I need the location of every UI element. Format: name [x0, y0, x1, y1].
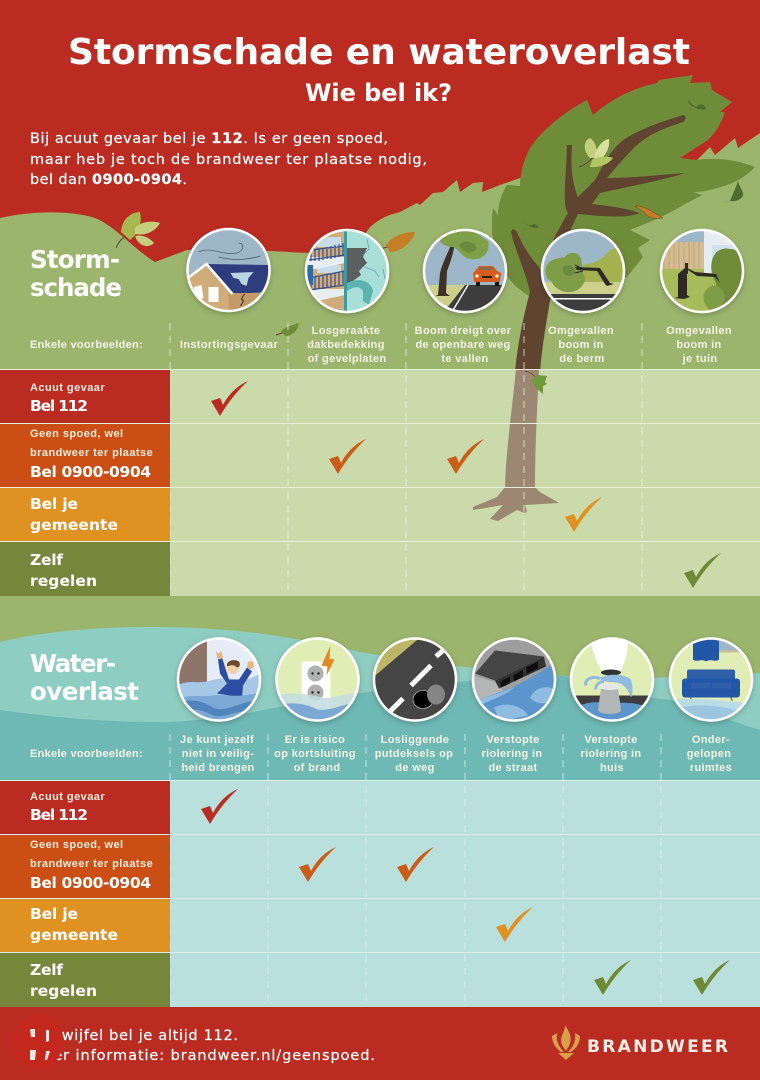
- row label: water municipality: [0, 899, 170, 952]
- column labels: water: putdeksels op: [375, 748, 453, 760]
- title: Stormschade en wateroverlast: [68, 32, 690, 73]
- leaf: dark right of canopy: [722, 181, 743, 203]
- row label: water no urgency: Bel 0900-0904: [30, 874, 151, 892]
- icon: person in water: [177, 638, 261, 722]
- row label: water self: [0, 953, 170, 1007]
- icon: flooded room with couch: [669, 638, 753, 722]
- row label: water acute: Bel 112: [30, 806, 88, 824]
- checks: storm: [211, 381, 721, 588]
- water section background: [0, 596, 760, 780]
- icon: fallen tree in garden: [660, 229, 744, 313]
- heading: water: Water-: [30, 649, 116, 678]
- intro paragraph: bel dan 0900-0904.: [30, 172, 187, 188]
- row label: water self: regelen: [30, 982, 97, 1000]
- footer text: [30, 1028, 375, 1064]
- leaf: pale in canopy: [579, 138, 613, 167]
- footer band: [0, 1007, 760, 1080]
- column labels: water: de weg: [395, 762, 435, 774]
- green storm hills: [0, 133, 760, 640]
- column labels: water: op kortsluiting: [274, 748, 356, 760]
- heading: storm: schade: [30, 273, 122, 302]
- row label: water no urgency: [0, 835, 170, 898]
- leaf: on trunk: [525, 371, 547, 394]
- column labels: water: de straat: [488, 762, 538, 774]
- row label: storm self: [0, 542, 170, 596]
- row label: water municipality: gemeente: [30, 926, 118, 944]
- leaf: dark left of canopy: [520, 218, 539, 228]
- column labels: storm: Boom dreigt over: [415, 325, 512, 337]
- column labels: storm: te vallen: [441, 353, 489, 365]
- column labels: storm: [180, 325, 732, 365]
- column labels: water: Losliggende: [381, 734, 449, 746]
- icon: flooded socket with lightning: [276, 638, 360, 722]
- row label: storm municipality: Bel je: [30, 495, 78, 513]
- row label: water no urgency: brandweer ter plaatse: [30, 858, 153, 870]
- row label: storm no urgency: Geen spoed, wel: [30, 428, 124, 440]
- heading: water: [30, 649, 139, 706]
- footer text: Meer informatie: brandweer.nl/geenspoed.: [30, 1048, 375, 1064]
- column labels: water: riolering in: [481, 748, 543, 760]
- heading: storm: Storm-: [30, 245, 120, 274]
- row label: storm acute: [0, 370, 170, 423]
- row label: water self: Zelf: [30, 961, 63, 979]
- column labels: storm: Omgevallen: [666, 325, 732, 337]
- column labels: water: Verstopte: [486, 734, 540, 746]
- row label: water no urgency: Geen spoed, wel: [30, 839, 124, 851]
- tree trunk in table, faded: [473, 369, 559, 521]
- column labels: storm: of gevelplaten: [308, 353, 386, 365]
- icon: overflowing toilet: [570, 638, 654, 722]
- intro paragraph: [30, 131, 427, 188]
- row label: storm municipality: [0, 488, 170, 541]
- leaf: small green near column: [276, 323, 299, 336]
- logo: Brandweer: [552, 1025, 728, 1060]
- row label: storm municipality: gemeente: [30, 516, 118, 534]
- red blob over footer text: [13, 1015, 63, 1069]
- icon: collapsing house: [186, 228, 270, 313]
- column labels: storm: je tuin: [682, 353, 717, 365]
- column labels: water: of brand: [294, 762, 340, 774]
- table: storm cells: [170, 369, 760, 596]
- row label: storm self: regelen: [30, 572, 97, 590]
- row label: storm no urgency: [0, 424, 170, 487]
- heading: storm: [30, 245, 122, 302]
- column labels: storm: dakbedekking: [307, 339, 385, 351]
- column labels: storm: Losgeraakte: [312, 325, 380, 337]
- tree trunk and branches: [511, 115, 686, 372]
- heading: water: overlast: [30, 677, 139, 706]
- intro paragraph: Bij acuut gevaar bel je 112. Is er geen spoed,: [30, 131, 388, 147]
- column labels: water: Verstopte: [584, 734, 638, 746]
- table: water cells: [170, 780, 760, 1007]
- leaf: orange in canopy: [635, 206, 663, 218]
- subtitle: Wie bel ik?: [305, 79, 452, 107]
- column labels: water: riolering in: [580, 748, 642, 760]
- column labels: water: Er is risico: [285, 734, 345, 746]
- icon: loose manhole covers: [373, 638, 457, 722]
- icon: loose roof and facade panels: [305, 229, 390, 313]
- leaf: top left cluster: [116, 212, 160, 248]
- column labels: storm: de berm: [559, 353, 605, 365]
- column labels: water: [180, 734, 732, 774]
- column labels: water: heid brengen: [181, 762, 255, 774]
- column labels: water: huis: [600, 762, 624, 774]
- tree canopy: [492, 75, 755, 302]
- checks: water: [201, 789, 730, 995]
- column labels: water: niet in veilig-: [182, 748, 254, 760]
- row label: water municipality: Bel je: [30, 905, 78, 923]
- intro: examples storm: Enkele voorbeelden:: [30, 339, 143, 351]
- storm row separators and column dashes: [0, 323, 760, 596]
- icon: fallen tree in verge: [541, 229, 625, 313]
- column labels: storm: boom in: [558, 339, 604, 351]
- intro paragraph: maar heb je toch de brandweer ter plaatse nodig,: [30, 152, 427, 168]
- icon: tree threatens road: [423, 229, 507, 313]
- leaf: orange on circle two: [370, 232, 415, 252]
- water row separators and column dashes: [0, 734, 760, 1007]
- row label: storm no urgency: Bel 0900-0904: [30, 463, 151, 481]
- column labels: water: ruimtes: [690, 762, 732, 774]
- row label: storm acute: Bel 112: [30, 397, 88, 415]
- row label: storm no urgency: brandweer ter plaatse: [30, 447, 153, 459]
- row label: storm acute: Acuut gevaar: [30, 382, 105, 394]
- intro: examples water: Enkele voorbeelden:: [30, 748, 143, 760]
- row label: water acute: [0, 781, 170, 834]
- column labels: storm: Instortingsgevaar: [180, 339, 278, 351]
- column labels: storm: de openbare weg: [415, 339, 511, 351]
- column labels: water: Je kunt jezelf: [180, 734, 254, 746]
- column labels: water: gelopen: [687, 748, 731, 760]
- column labels: water: Onder-: [692, 734, 730, 746]
- column labels: storm: boom in: [676, 339, 722, 351]
- row label: storm self: Zelf: [30, 551, 63, 569]
- icon: blocked street drain: [472, 638, 556, 722]
- logo: Brandweer: BRANDWEER: [587, 1037, 728, 1057]
- row label: water acute: Acuut gevaar: [30, 791, 105, 803]
- column labels: storm: Omgevallen: [548, 325, 614, 337]
- leaf: dark top of canopy: [688, 100, 706, 109]
- footer text: Bij twijfel bel je altijd 112.: [30, 1028, 238, 1044]
